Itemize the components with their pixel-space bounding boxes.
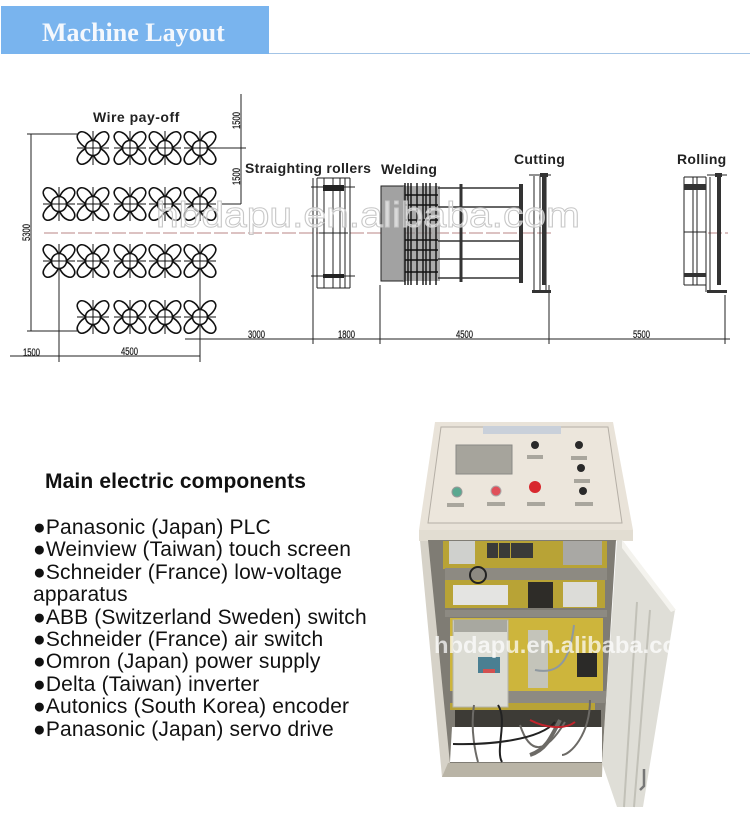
cables (453, 567, 590, 762)
din modules (453, 585, 508, 605)
components list: ●Weinview (Taiwan) touch screen (33, 538, 351, 561)
welding (381, 161, 522, 285)
door latch (640, 769, 644, 790)
components heading: Main electric components (45, 470, 306, 493)
dimension numbers: 4500 (121, 346, 138, 358)
title: Machine Layout (42, 18, 225, 47)
emergency stop (529, 481, 541, 493)
relay block (577, 653, 597, 677)
rails (445, 568, 607, 703)
welding assembly (403, 186, 440, 281)
header rule (1, 53, 750, 54)
cutter blade (532, 173, 551, 293)
components list: ●Panasonic (Japan) PLC (33, 516, 271, 539)
power supply (563, 541, 602, 565)
components list (33, 516, 367, 741)
components list: apparatus (33, 583, 128, 606)
green button (452, 487, 462, 497)
dimension numbers: 1500 (23, 347, 40, 359)
touch screen (456, 445, 512, 474)
cutter frame (529, 175, 551, 292)
watermark: hbdapu.en.alibaba.co (434, 632, 677, 658)
wire pay-off group (43, 109, 216, 334)
dimension numbers: 5300 (21, 224, 33, 241)
components list: ●Autonics (South Korea) encoder (33, 695, 349, 718)
label: straighting rollers: Straighting rollers (245, 160, 371, 176)
red button (491, 486, 501, 496)
cabinet door (602, 540, 676, 807)
pay-off row 1 (77, 131, 216, 165)
text block: main electric components (33, 470, 367, 741)
dimension numbers: 5500 (633, 329, 650, 341)
components list: ●Schneider (France) air switch (33, 628, 323, 651)
cabinet interior (428, 540, 616, 764)
roller frame (311, 178, 355, 288)
rolling clamps (684, 173, 727, 293)
cabinet body (419, 530, 633, 777)
breaker (449, 541, 475, 564)
roller clamps (323, 185, 344, 278)
label: cutting: Cutting (514, 151, 565, 167)
label: welding: Welding (381, 161, 437, 177)
servo drive (528, 630, 548, 688)
rolling (677, 151, 727, 293)
pay-off row 2 (43, 187, 216, 221)
inverter (453, 620, 508, 707)
components list: ●Schneider (France) low-voltage (33, 561, 342, 584)
components list: ●Panasonic (Japan) servo drive (33, 718, 334, 741)
pay-off row 4 (77, 300, 216, 334)
bottom frame (442, 763, 602, 777)
dimension numbers: 1800 (338, 329, 355, 341)
cutting (514, 151, 565, 293)
pay-off row 3 (43, 244, 216, 278)
label: wire pay-off: Wire pay-off (93, 109, 180, 125)
dimension numbers: 1500 (231, 112, 243, 129)
contactors (487, 543, 533, 558)
mesh table (438, 184, 522, 283)
header: machine layout (1, 6, 750, 54)
labels (447, 455, 593, 507)
dimension numbers: 1500 (231, 168, 243, 185)
watermark: hbdapu.en.alibaba.com (156, 194, 580, 235)
dimension numbers (21, 112, 650, 359)
straighting rollers (245, 160, 371, 288)
dimension numbers: 4500 (456, 329, 473, 341)
title banner (1, 6, 269, 54)
photo: electric control cabinet (419, 422, 677, 808)
selector knobs (531, 441, 587, 495)
components list: ●Omron (Japan) power supply (33, 650, 321, 673)
layout diagram (10, 94, 730, 362)
centre line (44, 232, 728, 234)
rolling frame (684, 175, 727, 292)
cabinet top panel (419, 422, 633, 530)
dimension lines (10, 94, 730, 362)
yellow back plates (443, 541, 607, 569)
label: rolling: Rolling (677, 151, 727, 167)
components list: ●Delta (Taiwan) inverter (33, 673, 259, 696)
dimension numbers: 3000 (248, 329, 265, 341)
nameplate (483, 426, 561, 434)
welding head (381, 186, 405, 281)
wire bay void (450, 727, 602, 762)
components list: ●ABB (Switzerland Sweden) switch (33, 606, 367, 629)
